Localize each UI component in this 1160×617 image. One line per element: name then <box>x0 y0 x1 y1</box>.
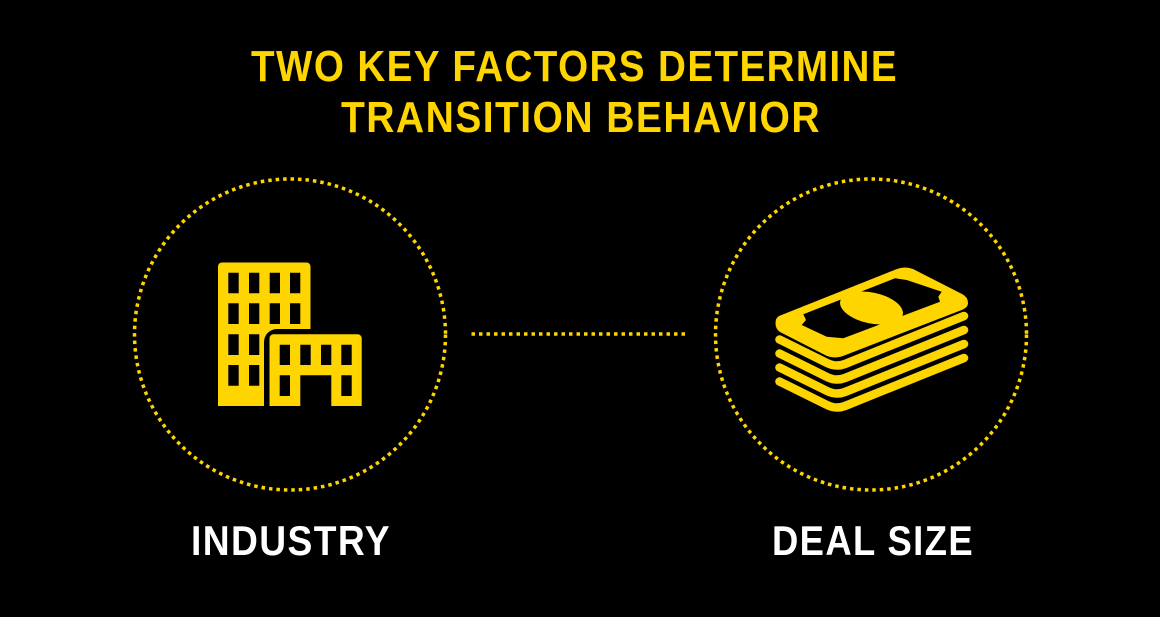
icon: buildings <box>218 262 362 406</box>
title: TWO KEY FACTORS DETERMINE <box>251 42 898 91</box>
label: industry: INDUSTRY <box>191 517 391 564</box>
icon: stack of money <box>776 268 968 408</box>
dotted connector line <box>472 332 688 336</box>
title <box>251 42 898 142</box>
dotted circle: industry <box>134 179 446 490</box>
label: deal size: DEAL SIZE <box>772 517 974 564</box>
dotted circle: deal size <box>716 179 1026 490</box>
title: TRANSITION BEHAVIOR <box>341 93 821 142</box>
